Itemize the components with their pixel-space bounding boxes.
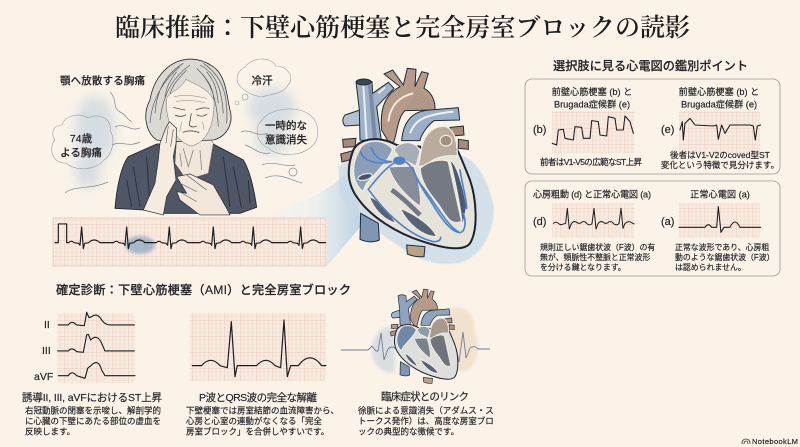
illustration: patient with symptoms — [65, 59, 302, 215]
caption block: ST elevation: 誘導II, III, aVFにおけるST上昇 — [22, 391, 162, 404]
right subheading: Brugada症候群 (e) — [681, 98, 757, 110]
thought cloud: transient loss of consciousness: 意識消失 — [265, 133, 307, 146]
thought cloud: cold sweat: 冷汗 — [252, 74, 273, 87]
label e: (e) — [661, 124, 674, 136]
caption block: clinical link: トークス発作）は、高度な房室ブロ — [358, 416, 494, 426]
ECG rhythm strip — [53, 218, 326, 266]
section heading: definitive diagnosis: 確定診断：下壁心筋梗塞（AMI）と完全房室ブロック — [56, 282, 351, 297]
caption block: AV dissociation: 心房と心室の連動がなくなる「完全 — [186, 416, 323, 426]
caption b: 前者はV1-V5の広範なST上昇 — [540, 157, 642, 167]
thought cloud: transient loss of consciousness — [257, 109, 318, 155]
left subheading: 心房粗動 (d) と正常心電図 (a) — [533, 188, 651, 200]
thought cloud: cold sweat — [235, 59, 291, 105]
caption block: AV dissociation: P波とQRS波の完全な解離 — [199, 391, 318, 404]
label d: (d) — [533, 216, 546, 228]
watermark: NotebookLM: NotebookLM — [752, 437, 798, 446]
conduction system — [361, 147, 467, 242]
caption block: clinical link: 徐脈による意識消失（アダムス・ス — [358, 406, 494, 416]
caption d: 規則正しい鋸歯状波（F波）の有 — [540, 242, 655, 252]
ECG d — [552, 203, 634, 238]
caption block: clinical link — [358, 390, 494, 436]
section heading: selected limb ECG points: 選択肢に見る心電図の鑑別ポイント — [553, 58, 748, 73]
symptom label: jaw pain: 顎へ放散する胸痛 — [60, 74, 145, 87]
symptom wisps — [65, 92, 302, 193]
chart: AV dissociation ECG — [190, 313, 326, 381]
panel: atrial flutter versus normal ECG — [525, 181, 780, 276]
heart chambers — [354, 126, 467, 237]
illustration: anatomical heart with conduction system — [338, 68, 494, 264]
thought cloud: age and chest pain — [52, 115, 113, 169]
watercolor wash behind patient — [75, 88, 296, 188]
right subheading: 正常心電図 (a) — [690, 188, 750, 200]
thought cloud: age and chest pain: 74歳 — [70, 132, 93, 145]
lead traces — [58, 312, 135, 378]
ECG a — [679, 203, 761, 238]
lead labels: III — [42, 345, 51, 357]
caption block: AV dissociation: 下壁梗塞では房室結節の血流障害から、 — [186, 406, 339, 416]
heart body — [349, 139, 476, 248]
caption block: clinical link: ックの典型的な徴候です。 — [358, 426, 459, 436]
thought cloud: transient loss of consciousness: 一時的な — [265, 119, 307, 132]
caption d: を分ける鍵となります。 — [540, 262, 626, 272]
lead labels: II — [44, 319, 50, 331]
left subheading: 前壁心筋梗塞 (b) と — [552, 86, 632, 97]
caption block: AV dissociation: 房室ブロック」を合併しやすいです。 — [186, 426, 329, 436]
lead labels — [34, 319, 53, 383]
panel: anterior MI versus Brugada — [525, 79, 780, 174]
patient figure — [115, 59, 257, 215]
right subheading: 前壁心筋梗塞 (b) と — [679, 86, 759, 97]
illustration: small heart with ECG trace — [341, 289, 490, 383]
caption a: は認められません。 — [675, 263, 746, 272]
ECG line — [341, 332, 490, 362]
caption e: 変化という特徴で見分けます。 — [661, 160, 779, 170]
thought cloud: age and chest pain: よる胸痛 — [60, 146, 102, 159]
caption a: 正常な波形であり、心房粗 — [675, 242, 769, 252]
chart: ST elevation in inferior leads — [34, 312, 135, 383]
caption block: clinical link: 臨床症状とのリンク — [381, 390, 469, 403]
watercolor behind heart — [338, 156, 494, 264]
label b: (b) — [533, 124, 546, 136]
caption block: ST elevation — [22, 391, 162, 436]
caption d: 無が、頻脈性不整脈と正常波形 — [540, 252, 650, 262]
caption block: ST elevation: に心臓の下壁にあたる部位の虚血を — [25, 416, 161, 426]
heart — [390, 289, 458, 383]
ECG b — [552, 111, 634, 153]
left subheading: Brugada症候群 (e) — [554, 98, 630, 110]
caption a: 動のような鋸歯状波（F波） — [675, 252, 775, 262]
caption block: ST elevation: 右冠動脈の閉塞を示唆し、解剖学的 — [25, 406, 161, 416]
caption block: AV dissociation — [186, 391, 339, 436]
great vessels — [341, 68, 468, 257]
label a: (a) — [661, 216, 674, 228]
title: 臨床推論：下壁心筋梗塞と完全房室ブロックの読影 — [115, 14, 690, 42]
callout wedge linking ECG to heart — [260, 170, 362, 266]
caption e: 後者はV1-V2のcoved型ST — [670, 150, 770, 160]
watercolor washes — [372, 307, 478, 373]
ECG e — [679, 111, 761, 153]
caption block: ST elevation: 反映します。 — [25, 426, 75, 436]
lead labels: aVF — [34, 371, 53, 383]
